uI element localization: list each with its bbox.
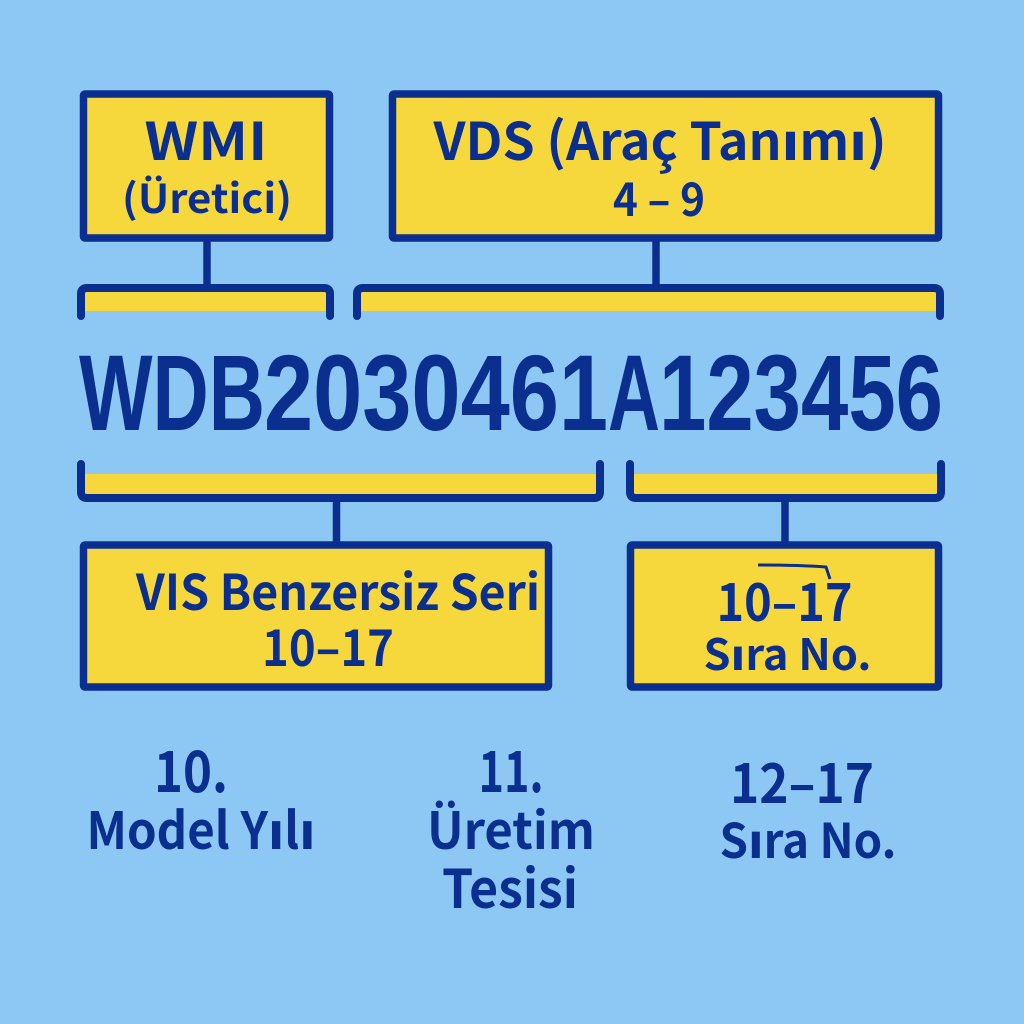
bracket: bottom left	[81, 464, 600, 498]
label: production plant	[427, 727, 595, 924]
label: model year: 10.	[154, 727, 228, 809]
VIN code: A	[608, 332, 660, 453]
panel: WMI: WMI	[144, 100, 268, 175]
panel: Sıra No: 10–17	[716, 562, 852, 636]
label: production plant: Tesisi	[442, 848, 578, 924]
panel: WMI: (Üretici)	[122, 167, 292, 225]
panel: VIS	[84, 498, 548, 687]
VIN code	[79, 332, 943, 453]
label: model year	[86, 727, 316, 864]
VIN code: WDB	[79, 332, 265, 453]
label: sequence number: Sıra No.	[720, 802, 896, 872]
label: production plant: 11.	[478, 727, 544, 809]
label: production plant: Üretim	[427, 790, 595, 864]
panel: VDS: VDS (Araç Tanımı)	[433, 100, 886, 175]
panel: Sıra No	[630, 498, 938, 687]
bracket: top left	[81, 288, 330, 316]
label: sequence number	[720, 740, 896, 872]
label: sequence number: 12–17	[730, 740, 874, 819]
panel: VIS: 10–17	[262, 610, 394, 681]
VIN code: 2030461	[264, 332, 608, 453]
panel: VDS: 4 – 9	[613, 164, 705, 229]
panel: Sıra No: Sıra No.	[704, 621, 872, 683]
bracket: bottom right	[630, 464, 941, 498]
label: model year: Model Yılı	[86, 790, 316, 864]
panel: VIS: VIS Benzersiz Seri	[135, 554, 540, 625]
panel: WMI	[84, 94, 330, 288]
panel: VDS	[392, 94, 938, 288]
bracket: top right	[357, 288, 940, 316]
VIN code: 123456	[659, 332, 943, 453]
